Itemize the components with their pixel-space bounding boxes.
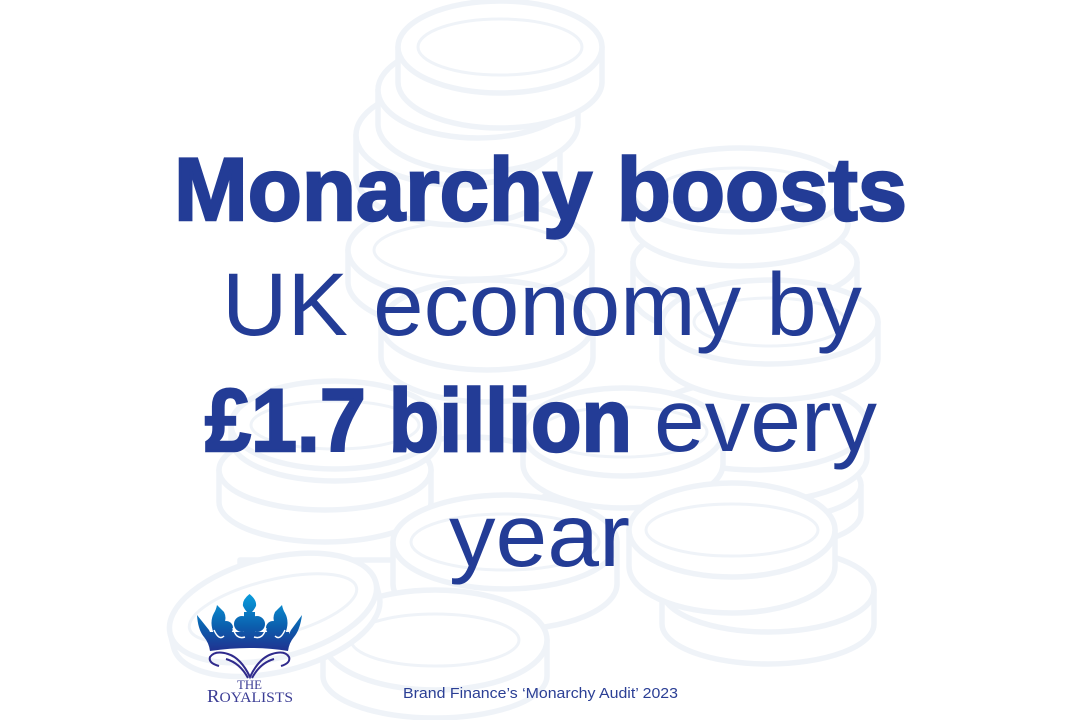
headline line 3 amount: £1.7 billion	[205, 370, 632, 470]
headline	[174, 139, 907, 585]
background: pile of coins	[158, 1, 878, 718]
logo wordmark: THE	[237, 678, 262, 692]
logo wordmark	[207, 678, 293, 706]
logo wordmark: ROYALISTS	[207, 686, 293, 706]
headline line 4: year	[449, 485, 630, 585]
headline line 1: Monarchy boosts	[174, 139, 907, 239]
headline line 2: UK economy by	[222, 254, 863, 354]
logo: The Royalists	[197, 594, 302, 706]
source note: Brand Finance’s ‘Monarchy Audit’ 2023	[403, 686, 678, 702]
icon: crown	[197, 594, 302, 678]
headline line 3 every: every	[654, 370, 878, 470]
